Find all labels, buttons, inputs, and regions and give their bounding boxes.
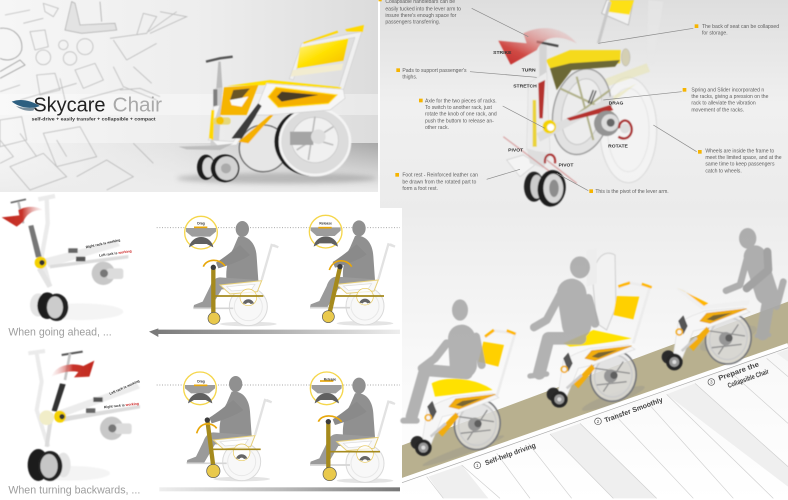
action labels: STRETCH	[513, 84, 537, 90]
axle knob	[543, 120, 556, 133]
chair 2: transfer	[530, 248, 652, 415]
callout: wheels	[698, 148, 782, 174]
action labels: TURN	[522, 67, 536, 73]
person pushing	[726, 228, 783, 336]
foot rest	[507, 155, 537, 177]
action labels: PIVOT	[559, 163, 573, 169]
callout: axle: push the buttom to release an-	[425, 118, 494, 124]
diagram: drag backward	[184, 372, 272, 481]
exploded chair	[498, 0, 663, 208]
seat cushion	[546, 50, 621, 80]
callout: seat back: for storage.	[702, 31, 728, 37]
panel: feature callouts	[378, 0, 788, 210]
callout: axle: Axle for the two pieces of racks.	[425, 98, 497, 104]
step label 3: Prepare the	[718, 361, 760, 383]
front wheels	[524, 172, 544, 202]
step label 1: 1	[476, 463, 479, 468]
sketches background	[0, 2, 187, 190]
callout: wheels: same time to keep passengers	[705, 162, 775, 168]
crossing stripes	[428, 349, 788, 498]
diagram: release ahead	[309, 215, 395, 326]
going ahead lever illustration	[2, 196, 128, 321]
step label 1: Self-help driving	[484, 442, 537, 467]
callout: spring and slider: rack to alleviate the vibration	[691, 101, 756, 107]
brand name: Chair	[113, 94, 162, 117]
sidewalk road	[402, 302, 788, 498]
step label 2: Transfer Smoothly	[604, 397, 664, 425]
step label 3	[708, 361, 770, 390]
callout: handlebars: passengers transferring.	[385, 19, 440, 25]
callout: handlebars: insure there's enough space for	[385, 13, 457, 19]
callout: axle: rotate the knob of one rack, and	[425, 112, 497, 118]
seat and frame	[227, 80, 342, 92]
floor shading	[0, 143, 378, 192]
callout: seat back: The back of seat can be collapsed	[702, 24, 779, 30]
panel: Skycare Chair hero	[0, 0, 378, 192]
caption: going ahead: When going ahead, ...	[8, 326, 112, 338]
chair 3: collapsible	[662, 228, 783, 370]
rack labels bottom: Left rack is working	[109, 379, 140, 396]
action labels	[493, 50, 629, 169]
callout: spring and slider: the racks, giving a pression on the	[691, 94, 769, 100]
callout: pads: Pads to support passenger's	[402, 68, 467, 74]
brand name: Skycare	[33, 95, 106, 117]
step label 3: Collapsible Chair	[727, 368, 770, 390]
rack labels top: Right rack is working	[85, 238, 121, 249]
callout: wheels: meet the limited space, and at the	[705, 155, 782, 161]
loupe: Release	[319, 222, 332, 226]
step label 3: 3	[710, 380, 713, 385]
person transferring	[530, 256, 595, 376]
footrest	[178, 143, 233, 150]
red arrow	[498, 28, 577, 65]
action labels: ROTATE	[608, 144, 629, 150]
callout: axle: To switch to another rack, just	[425, 105, 492, 111]
lever arm	[539, 39, 547, 87]
callout: axle: other rack.	[425, 125, 449, 131]
callout: spring and slider: Spring and Slider incorporated n	[691, 87, 764, 93]
rack labels top	[85, 238, 132, 258]
callout: wheels: catch to wheels.	[705, 168, 742, 174]
backrest	[289, 32, 362, 90]
person driving	[403, 299, 482, 421]
diagram: drag ahead	[185, 216, 278, 326]
rack and gear	[567, 105, 613, 121]
callout: seat back	[695, 24, 779, 37]
caster wheels	[197, 155, 215, 180]
callout: pads	[396, 68, 467, 81]
callout: foot rest: form a foot rest.	[402, 186, 438, 192]
handlebar	[216, 62, 223, 92]
rear wheel	[274, 107, 349, 176]
diagram: release backward	[310, 372, 395, 483]
callout: foot rest	[395, 173, 478, 192]
turning backwards lever illustration	[28, 351, 140, 481]
action labels: STRIKE	[493, 50, 512, 56]
panel: usage scenario	[402, 210, 788, 500]
logo swoosh	[12, 100, 40, 108]
callout: handlebars: easily tucked into the lever arm to	[385, 7, 461, 13]
loupe: Drag	[197, 379, 205, 383]
leader lines	[470, 8, 697, 191]
hero wheelchair	[177, 25, 377, 184]
loupe: Release	[324, 378, 336, 382]
callout: spring and slider	[683, 87, 769, 113]
tagline: self-drive + easily transfer + collapsible + compact	[32, 116, 156, 121]
arrow: backward line	[159, 487, 400, 491]
rack labels top: Left rack is working	[99, 249, 132, 258]
callout: pads: thighs.	[402, 75, 417, 81]
callout: spring and slider: movement of the racks.	[691, 107, 744, 113]
chair 1: self-help driving	[403, 299, 516, 469]
dotted reference lines	[157, 228, 400, 385]
step label 2: 2	[597, 419, 600, 424]
panel: lever mechanism	[0, 192, 402, 500]
callout: axle	[419, 98, 497, 131]
arrow: forward motion	[149, 328, 400, 337]
caption: turning backwards: When turning backwards, ...	[8, 485, 140, 497]
callout: foot rest: Foot rest - Reinforced leather can	[402, 173, 478, 179]
rack labels bottom	[104, 379, 140, 409]
action labels: DRAG	[609, 101, 623, 107]
callout: handlebars	[378, 0, 461, 25]
action labels: PIVOT	[508, 148, 523, 154]
callout: foot rest: be drawn from the rotated part to	[402, 179, 476, 185]
logo	[12, 94, 162, 121]
loupe: Drag	[197, 222, 205, 226]
callout: wheels: Wheels are inside the frame to	[705, 148, 774, 154]
rack labels bottom: Right rack is working	[104, 402, 139, 409]
callout: pivot: This is the pivot of the lever arm.	[595, 189, 669, 195]
